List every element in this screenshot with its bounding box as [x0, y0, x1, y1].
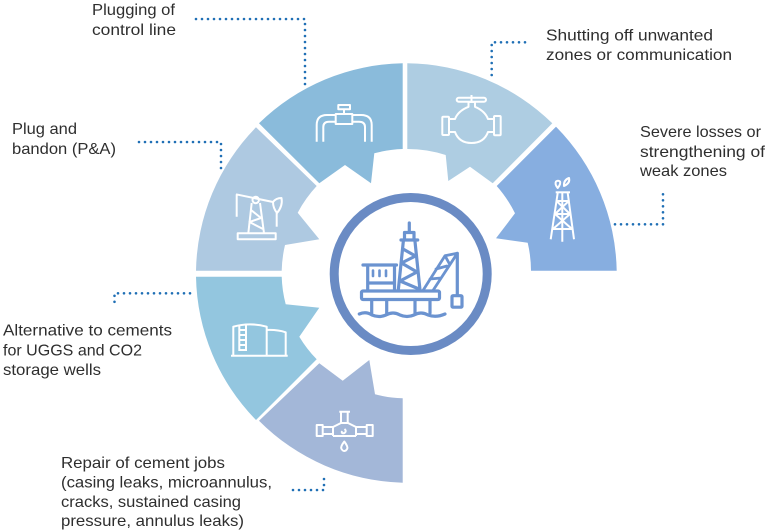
label: repair of cement jobs: Repair of cement jobs: [61, 455, 225, 472]
segment: shutting off zones: [407, 63, 552, 183]
icon: oil derrick: [551, 178, 574, 242]
icon: pumpjack: [236, 194, 282, 239]
segment: alternative to cements: [196, 277, 319, 420]
segment: control line: [259, 63, 403, 183]
panel: plugging of control line: [92, 2, 403, 183]
leader line: [196, 19, 305, 87]
panel: plug and abandon: [12, 121, 319, 271]
label: repair of cement jobs: (casing leaks, microannulus,: [61, 475, 272, 492]
panel: severe losses: [496, 124, 766, 271]
icon: leaking pipe: [317, 412, 373, 451]
icon: storage tanks: [231, 324, 288, 356]
icon: valve: [442, 95, 501, 143]
label: plug and abandon: bandon (P&A): [12, 141, 116, 158]
label: plugging of control line: Plugging of: [92, 2, 176, 19]
panel: repair of cement jobs: [61, 360, 403, 530]
icon: offshore platform: [359, 223, 462, 316]
label: shutting off zones: Shutting off unwanted: [546, 28, 713, 44]
label: alternative to cements: for UGGS and CO2: [3, 343, 142, 360]
leader line: [114, 293, 190, 305]
label: plugging of control line: [92, 2, 176, 39]
label: severe losses: strengthening of: [640, 144, 766, 161]
label: repair of cement jobs: cracks, sustained casing: [61, 494, 241, 511]
leader line: [615, 193, 663, 224]
label: repair of cement jobs: pressure, annulus leaks): [61, 513, 244, 530]
label: severe losses: weak zones: [639, 163, 727, 180]
label: plug and abandon: [12, 121, 116, 158]
label: shutting off zones: zones or communication: [546, 47, 732, 64]
leader line: [293, 474, 324, 490]
label: alternative to cements: Alternative to cements: [3, 323, 172, 340]
segment: plug and abandon: [196, 127, 319, 271]
label: alternative to cements: [3, 323, 172, 379]
label: repair of cement jobs: [61, 455, 272, 530]
panel: central offshore platform: [334, 198, 487, 350]
center ring: [334, 198, 487, 350]
label: plugging of control line: control line: [92, 22, 176, 39]
label: severe losses: Severe losses or: [640, 124, 762, 141]
segment: repair of cement jobs: [259, 360, 403, 483]
label: alternative to cements: storage wells: [3, 362, 101, 379]
panel: shutting off zones: [407, 28, 732, 183]
icon: pipe: [317, 105, 372, 142]
panel: alternative to cements: [3, 277, 319, 420]
segment: severe losses: [496, 127, 617, 271]
leader line: [139, 142, 221, 172]
label: severe losses: [639, 124, 766, 180]
label: plug and abandon: Plug and: [12, 121, 77, 138]
leader line: [492, 42, 525, 78]
label: shutting off zones: [546, 28, 732, 64]
